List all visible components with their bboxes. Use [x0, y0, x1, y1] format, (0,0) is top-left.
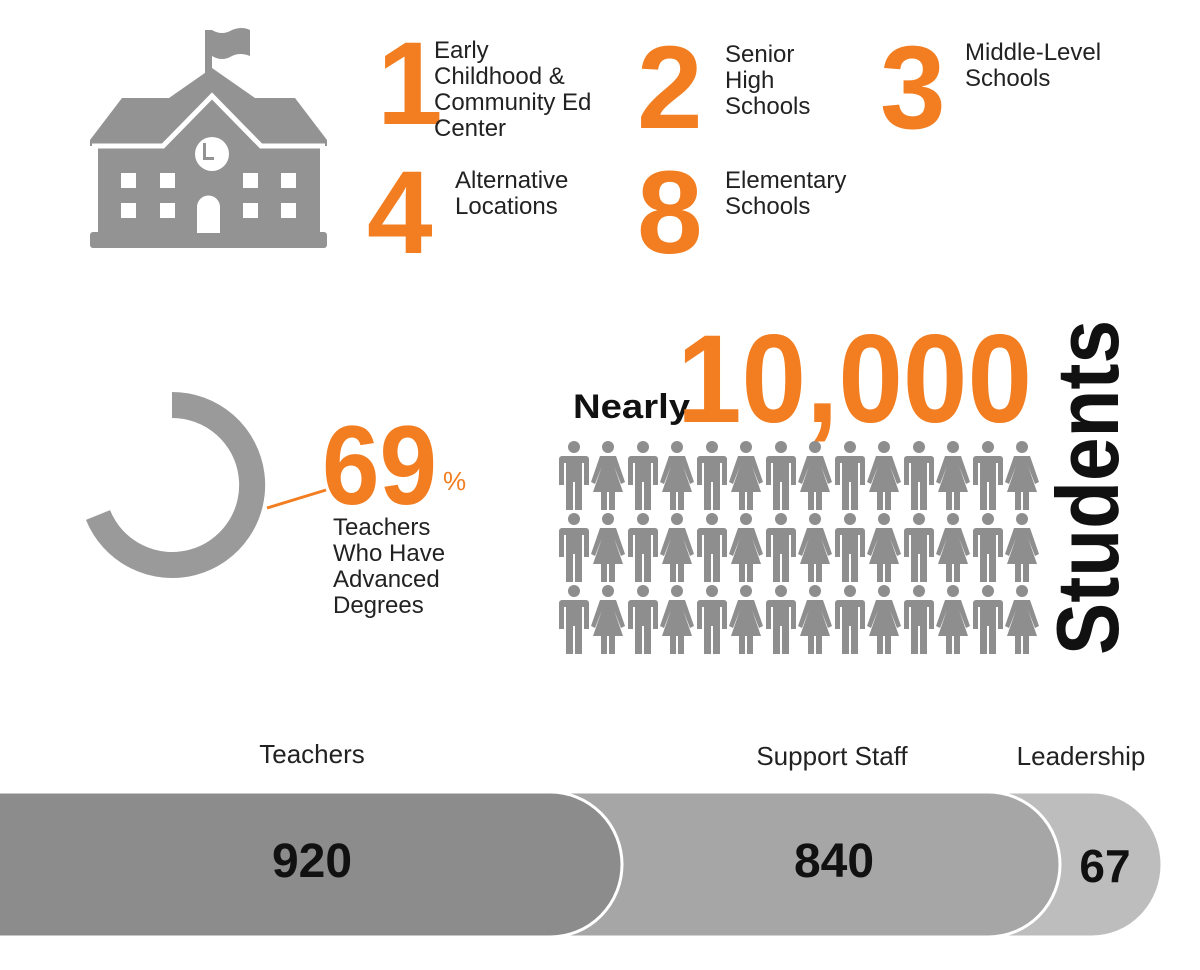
bar: leadership: 67	[1079, 840, 1131, 892]
stat: 8 elementary schools: Elementary	[725, 167, 846, 194]
stat: 69% teachers advanced degrees: Teachers	[333, 514, 430, 541]
stat: 69% teachers advanced degrees: Who Have	[333, 540, 445, 567]
bar: leadership: Leadership	[1017, 741, 1145, 771]
stat: 69% teachers advanced degrees	[322, 403, 466, 619]
chart: donut 69%	[98, 405, 326, 565]
icon: school building	[90, 28, 327, 248]
stat: 8 elementary schools: 8	[637, 147, 703, 279]
bar: support staff: 840	[794, 835, 874, 888]
bar: teachers	[0, 739, 622, 937]
stat: 3 middle-level schools: Schools	[965, 65, 1050, 92]
stat: 1 early childhood center: Childhood &	[434, 63, 565, 90]
stat: 2 senior high schools: Schools	[725, 93, 810, 120]
stat: 3 middle-level schools: Middle-Level	[965, 39, 1101, 66]
stat: 2 senior high schools: High	[725, 67, 774, 94]
bar: teachers: 920	[272, 835, 352, 888]
stat: 69% teachers advanced degrees: %	[443, 466, 466, 496]
bar: support staff: Support Staff	[756, 741, 908, 771]
stat: 1 early childhood center: 1	[377, 18, 443, 150]
stat: 69% teachers advanced degrees: 69	[322, 403, 437, 528]
heading: nearly 10,000: 10,000	[677, 310, 1032, 449]
stat: 1 early childhood center: Community Ed	[434, 89, 591, 116]
stat: 8 elementary schools	[637, 147, 846, 279]
stat: 2 senior high schools	[637, 22, 810, 154]
stat: 3 middle-level schools	[880, 22, 1101, 154]
stat: 8 elementary schools: Schools	[725, 193, 810, 220]
bar: leadership	[900, 741, 1162, 937]
stat: 1 early childhood center	[377, 18, 591, 150]
bar: support staff	[500, 741, 1060, 937]
stat: 4 alternative locations: Locations	[455, 193, 558, 220]
stat: 1 early childhood center: Center	[434, 115, 506, 142]
icon grid: students	[559, 441, 1039, 654]
stat: 1 early childhood center: Early	[434, 37, 489, 64]
stat: 3 middle-level schools: 3	[880, 22, 946, 154]
heading: nearly 10,000: Nearly	[573, 388, 690, 426]
stat: 69% teachers advanced degrees: Degrees	[333, 592, 424, 619]
stat: 2 senior high schools: 2	[637, 22, 703, 154]
bar: teachers: Teachers	[259, 739, 365, 769]
stat: 2 senior high schools: Senior	[725, 41, 794, 68]
stat: 69% teachers advanced degrees: Advanced	[333, 566, 440, 593]
heading: students vertical: Students	[1038, 320, 1137, 655]
stat: 4 alternative locations: Alternative	[455, 167, 568, 194]
stat: 4 alternative locations	[367, 147, 568, 279]
stat: 4 alternative locations: 4	[367, 147, 433, 279]
